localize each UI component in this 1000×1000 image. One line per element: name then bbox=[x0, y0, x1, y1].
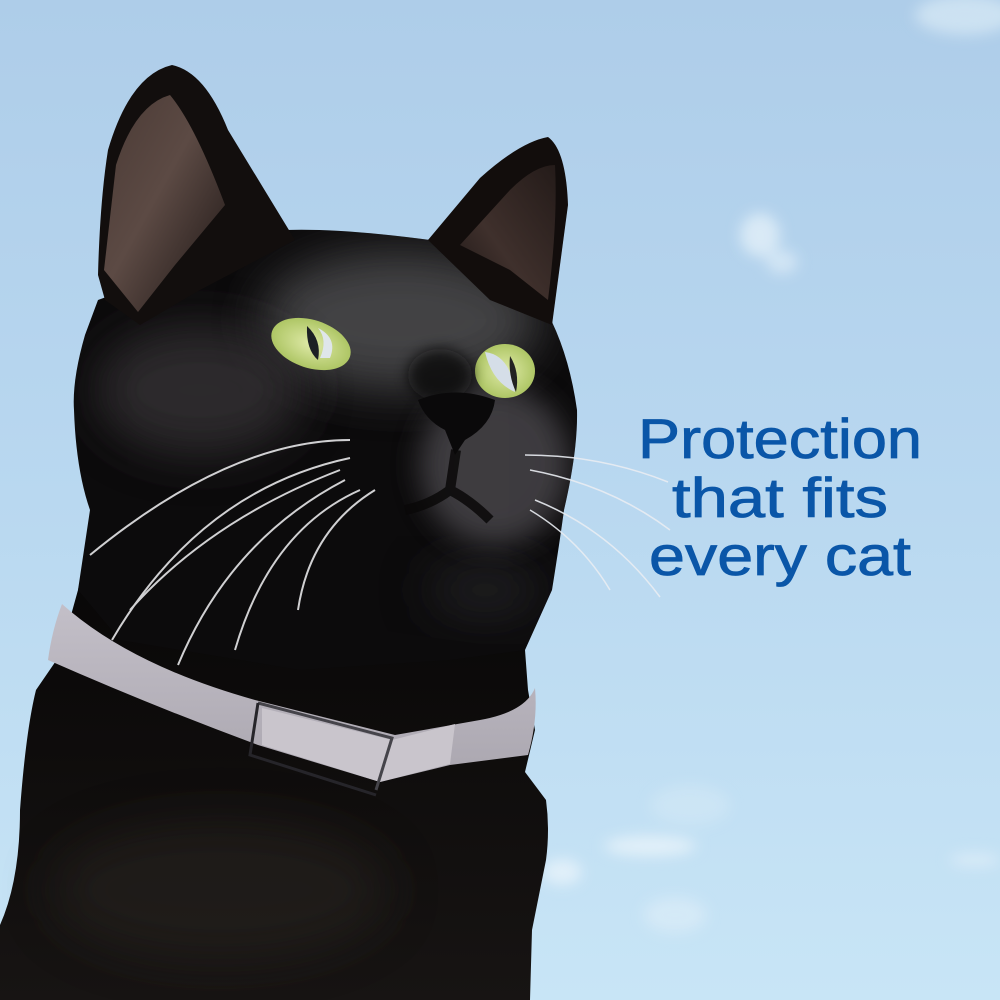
cheek lit fur bbox=[95, 325, 305, 455]
left ear inner bbox=[104, 95, 225, 312]
left ear bbox=[98, 65, 295, 325]
headline: that fits bbox=[672, 466, 888, 529]
whiskers: right bbox=[525, 455, 670, 597]
chest fur sheen bbox=[50, 820, 390, 960]
mouth and chin shadow bbox=[405, 450, 490, 520]
collar bbox=[48, 604, 536, 795]
muzzle lit fur bbox=[420, 385, 570, 545]
cat body bbox=[0, 540, 548, 1000]
nose bbox=[418, 392, 495, 455]
left eye bbox=[265, 309, 357, 379]
collar flap bbox=[262, 708, 455, 782]
collar buckle bbox=[250, 703, 392, 795]
right ear inner bbox=[460, 165, 556, 300]
head bbox=[74, 230, 577, 670]
forehead lit fur bbox=[260, 250, 540, 390]
right eye bbox=[475, 344, 535, 398]
cat bbox=[0, 65, 670, 1000]
head shading bbox=[95, 250, 570, 620]
headline: every cat bbox=[649, 524, 912, 587]
throat fur bbox=[436, 562, 534, 622]
collar band bbox=[48, 604, 536, 782]
clouds bbox=[542, 0, 1000, 933]
whiskers: left bbox=[90, 440, 375, 665]
headline: Protection bbox=[638, 407, 922, 470]
right ear bbox=[428, 137, 568, 325]
nose bridge shadow bbox=[408, 349, 472, 401]
headline bbox=[638, 407, 922, 587]
